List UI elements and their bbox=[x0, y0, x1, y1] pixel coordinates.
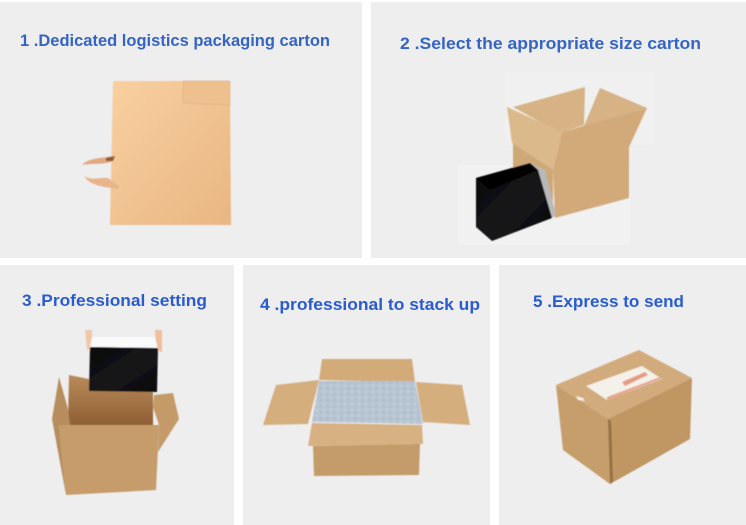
illustration: open carton and black box bbox=[476, 87, 647, 241]
illustration: sealed carton with shipping label bbox=[556, 350, 692, 484]
heading: step 2: 2 .Select the appropriate size carton bbox=[400, 34, 701, 53]
heading: step 1: 1 .Dedicated logistics packaging carton bbox=[20, 31, 330, 50]
panel: step 3 bbox=[0, 265, 234, 525]
panel: step 2 bbox=[371, 2, 746, 258]
illustration: box lowered into carton bbox=[52, 330, 179, 495]
illustration: flat carton sheet with hands bbox=[82, 81, 231, 225]
illustration: carton with bubble-wrapped item bbox=[263, 359, 470, 476]
heading: step 4: 4 .professional to stack up bbox=[260, 295, 480, 314]
panel: step 5 bbox=[499, 265, 746, 525]
panel: step 1 bbox=[0, 2, 362, 258]
heading: step 3: 3 .Professional setting bbox=[22, 291, 207, 310]
heading: step 5: 5 .Express to send bbox=[533, 292, 684, 311]
panel: step 4 bbox=[243, 265, 490, 525]
